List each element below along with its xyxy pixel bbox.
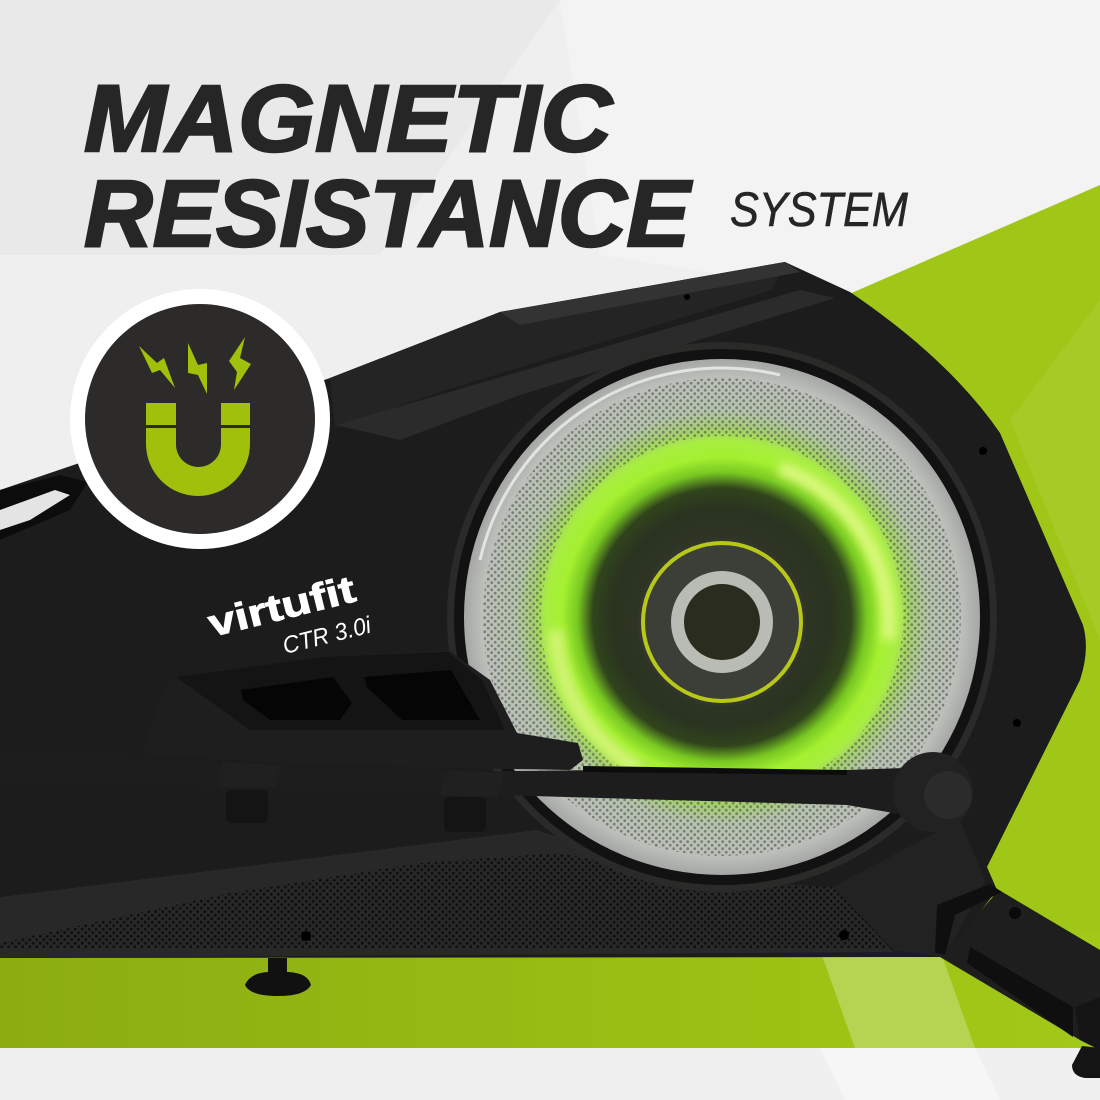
model logo [204,569,374,660]
rear stabiliser beam [935,884,1100,1078]
model logo: virtufit [204,569,360,646]
title: MAGNETIC [84,66,613,172]
pedal arm [0,650,973,832]
flywheel with green glow [447,342,997,892]
icon: magnet badge [70,289,330,549]
title: RESISTANCE [84,161,693,267]
model logo: CTR 3.0i [280,612,374,660]
title: SYSTEM [730,184,908,237]
title [84,66,908,267]
foot [245,958,311,996]
elliptical trainer body [0,262,1086,958]
